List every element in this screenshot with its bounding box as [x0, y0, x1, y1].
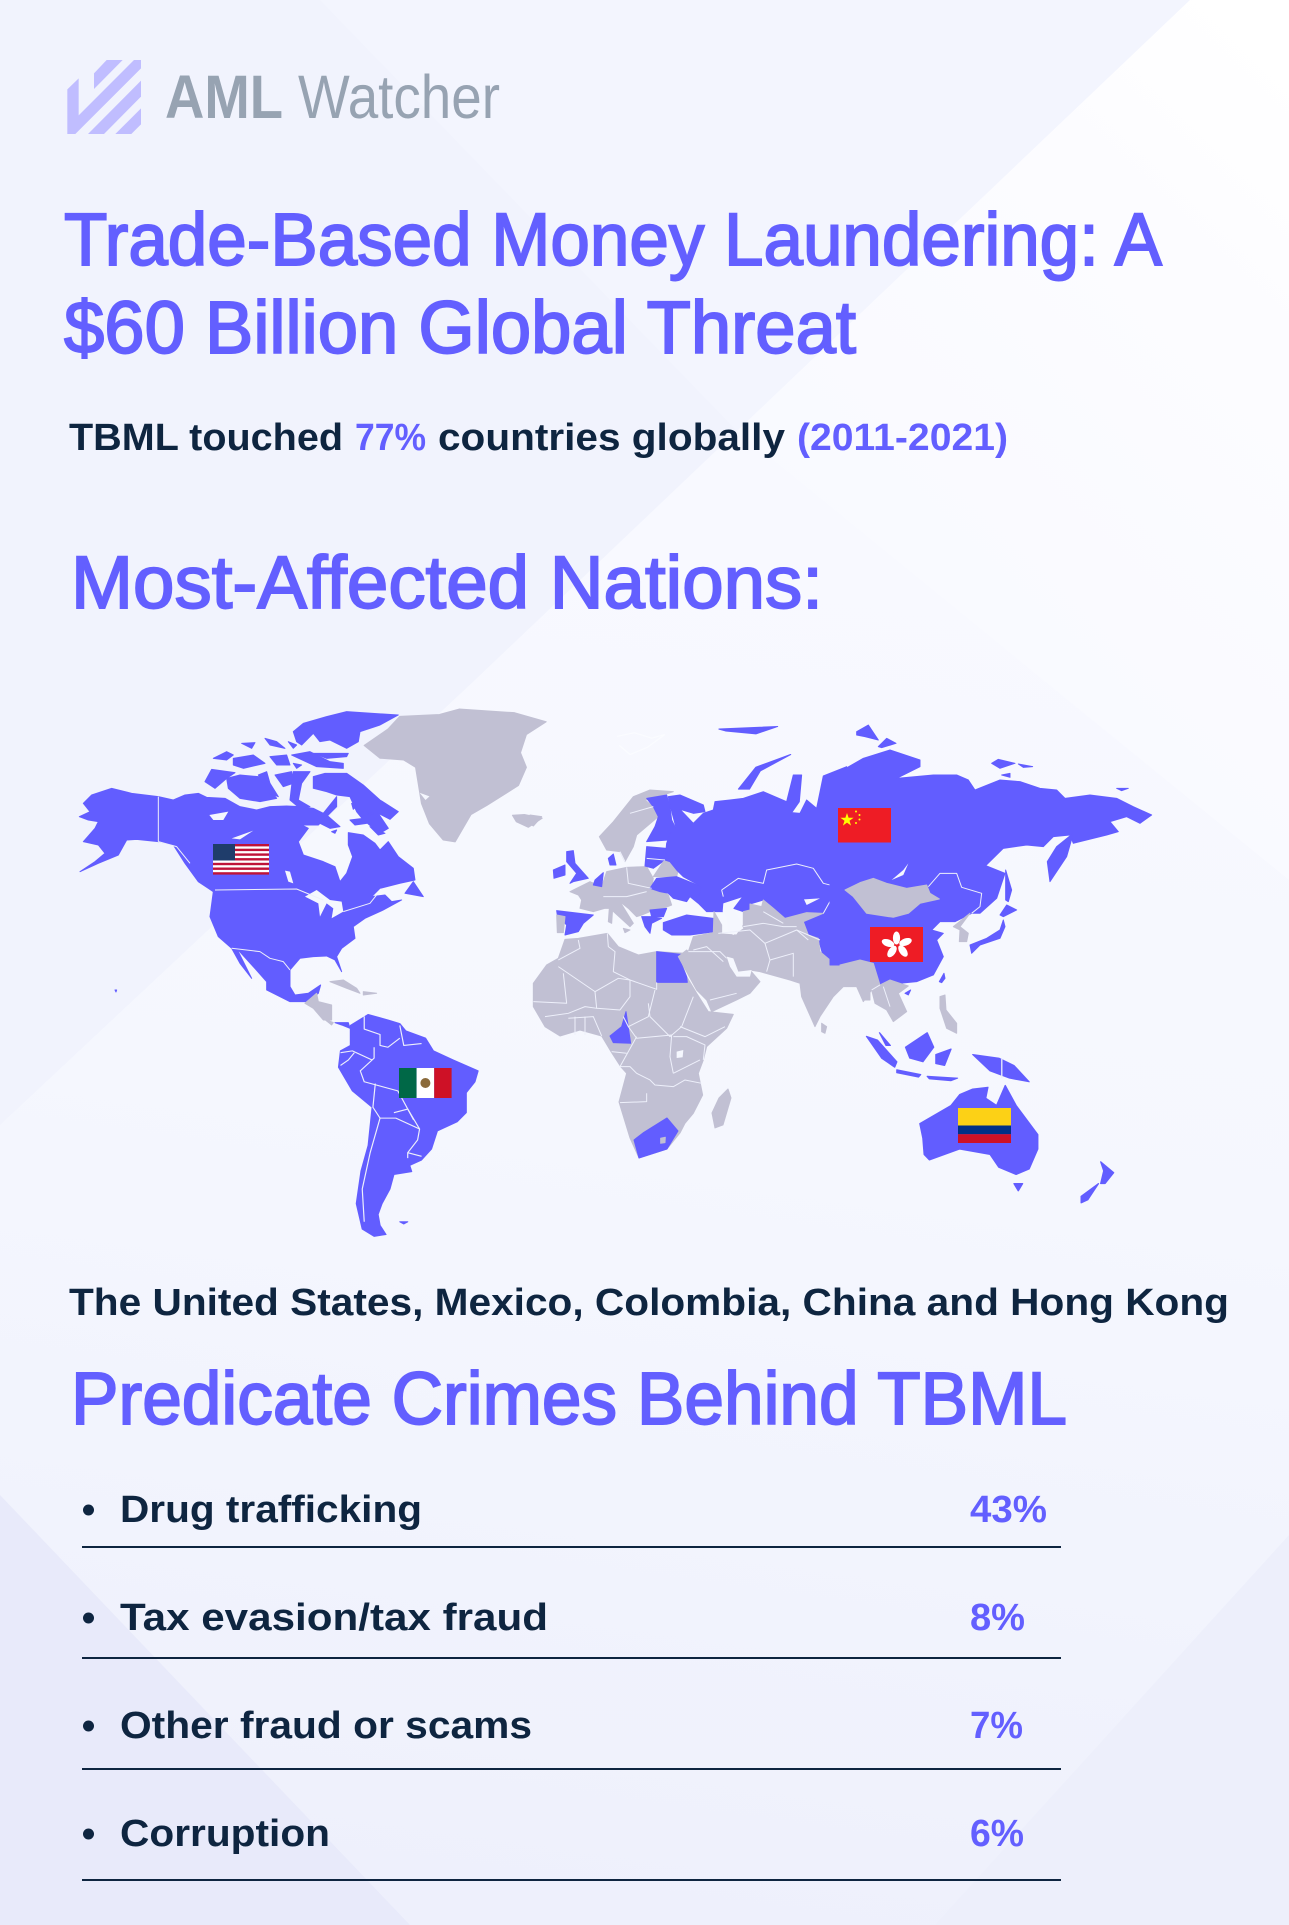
map: Greenland, Iceland and South America	[339, 709, 546, 1236]
icon: logo mark	[67, 60, 141, 134]
heading: most-affected nations: Most-Affected Nations:	[71, 541, 823, 624]
row: other fraud: 7%	[970, 1705, 1023, 1747]
subtitle: TBML touched	[69, 417, 343, 459]
flag: Mexico	[399, 1068, 452, 1098]
subtitle: countries globally	[438, 417, 785, 459]
subtitle: (2011-2021)	[797, 417, 1008, 459]
flag: United States	[213, 844, 269, 875]
row: other fraud	[82, 1705, 1061, 1770]
map: North America	[79, 712, 423, 1028]
map: Europe, Africa, western Asia	[528, 767, 870, 1158]
flag: Hong Kong	[870, 927, 923, 962]
logo wordmark second word: Watcher	[298, 63, 500, 131]
row: corruption: 6%	[970, 1813, 1024, 1855]
row: corruption: Corruption	[120, 1813, 330, 1855]
map: islands and Oceania	[617, 727, 1114, 1203]
title	[64, 198, 1163, 369]
title: $60 Billion Global Threat	[64, 286, 856, 369]
heading: predicate crimes: Predicate Crimes Behind TBML	[71, 1357, 1067, 1440]
logo	[67, 60, 500, 134]
subtitle	[69, 417, 1008, 459]
row: drug trafficking: Drug trafficking	[120, 1489, 422, 1531]
flag: Colombia	[958, 1108, 1011, 1143]
logo wordmark: AML	[165, 63, 283, 131]
map borders: North America	[158, 797, 377, 970]
row: other fraud: Other fraud or scams	[120, 1705, 532, 1747]
map borders: South America	[341, 1016, 422, 1222]
row: drug trafficking	[82, 1489, 1061, 1548]
title: Trade-Based Money Laundering: A	[64, 198, 1163, 281]
flag: China	[838, 808, 891, 842]
row: drug trafficking: 43%	[970, 1489, 1047, 1531]
row: corruption	[82, 1813, 1061, 1881]
world map	[79, 709, 1152, 1236]
map borders: eastern Asia	[872, 873, 982, 1007]
subtitle: 77%	[355, 417, 426, 459]
row: tax evasion	[82, 1597, 1061, 1659]
list: predicate crimes	[82, 1489, 1061, 1881]
map borders: Africa and Asia	[533, 807, 858, 1103]
map: eastern Asia	[830, 725, 1152, 1033]
row: tax evasion: 8%	[970, 1597, 1025, 1639]
caption: most-affected nations list: The United States, Mexico, Colombia, China and Hong Kong	[69, 1282, 1229, 1324]
row: tax evasion: Tax evasion/tax fraud	[120, 1597, 548, 1639]
